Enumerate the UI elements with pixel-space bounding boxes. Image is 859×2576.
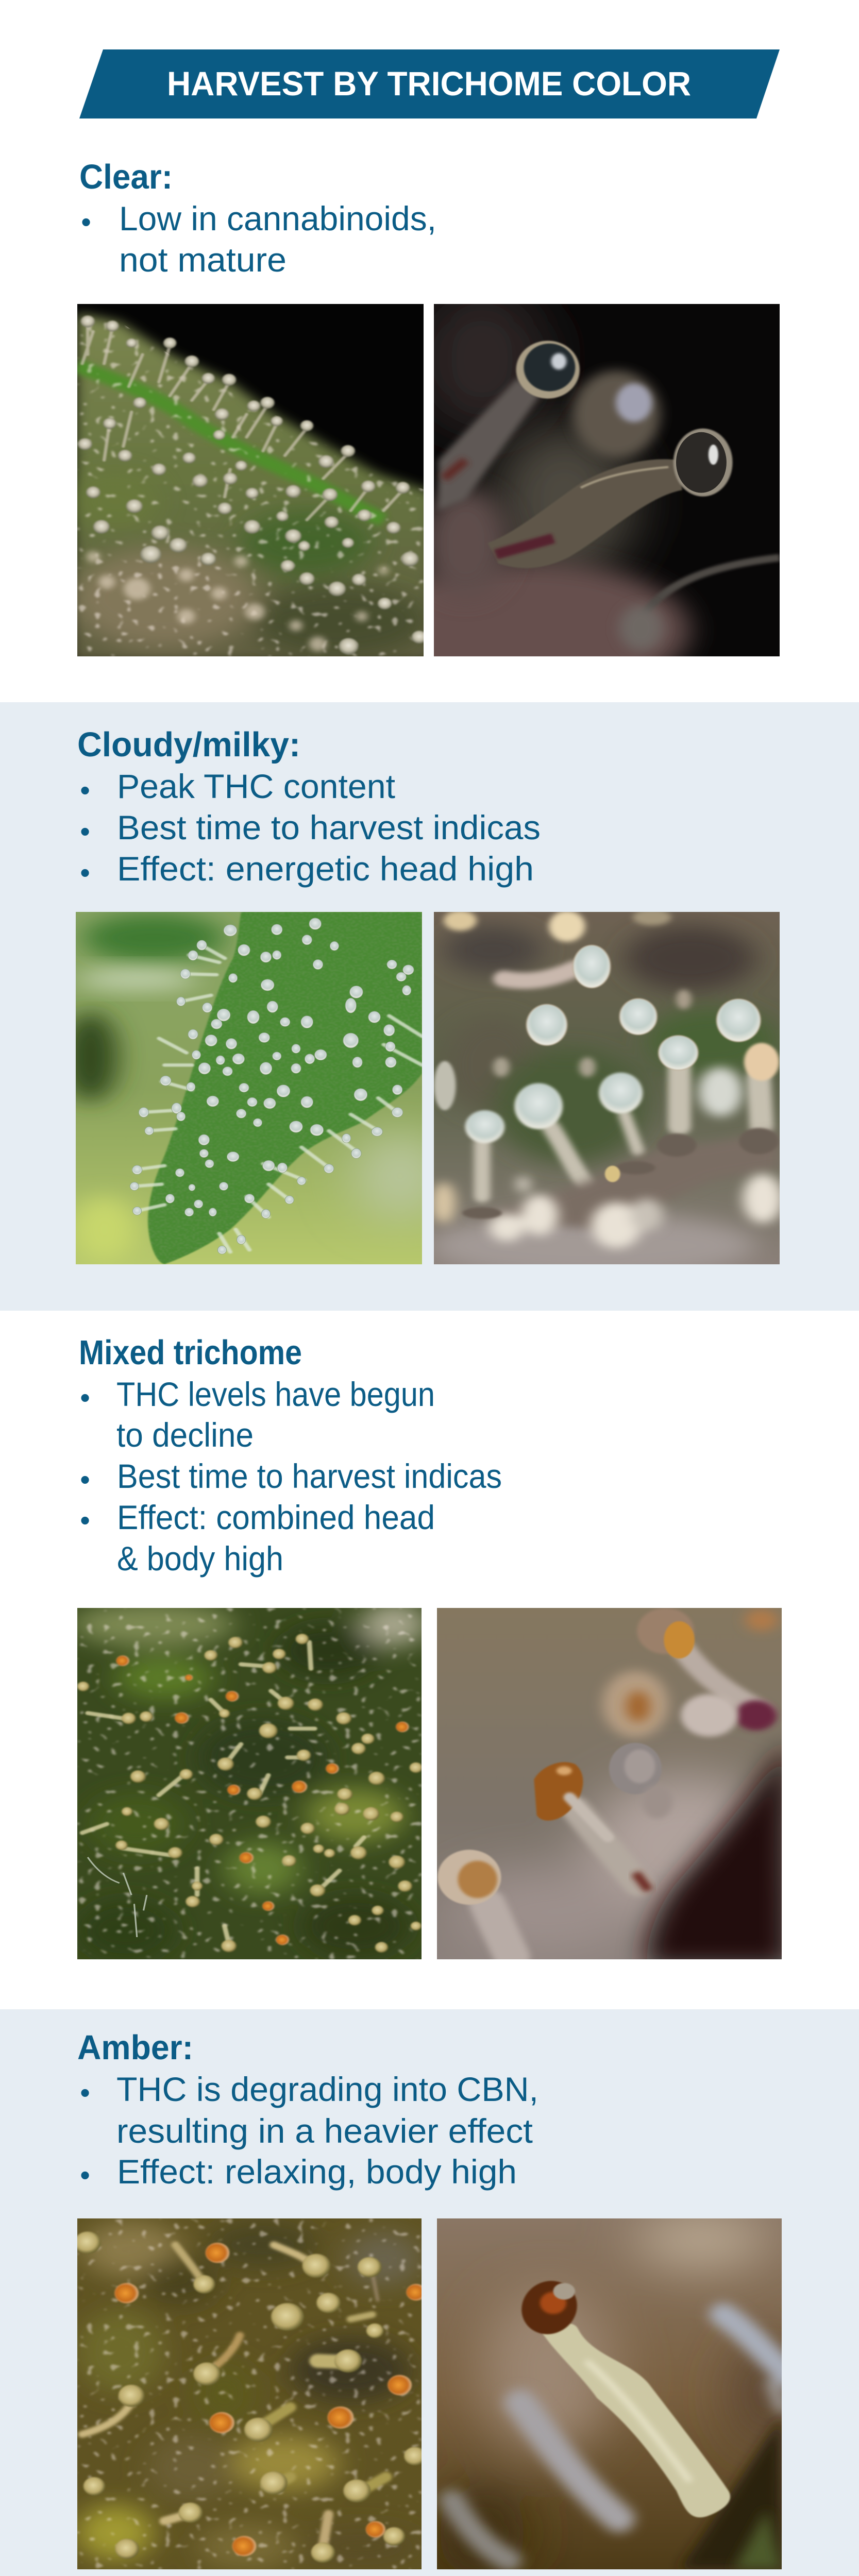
panel: cloudy/milky trichomes (0, 702, 859, 1311)
photo: cloudy trichomes on green leaf (76, 912, 422, 1264)
bullet list: mixed trichome: to decline (116, 1416, 254, 1454)
bullet list: amber: THC is degrading into CBN, (116, 2070, 538, 2108)
bullet list: cloudy/milky: • (80, 774, 90, 806)
bullet list: mixed trichome: Best time to harvest indicas (117, 1457, 502, 1495)
bullet list: amber: resulting in a heavier effect (116, 2112, 533, 2150)
photo: clear trichomes on leaf edge (77, 304, 424, 656)
photo: clear trichome close-up (434, 304, 780, 656)
bullet list: mixed trichome: • (80, 1504, 90, 1536)
bullet list: mixed trichome: • (80, 1463, 90, 1496)
bullet list: cloudy/milky: Peak THC content (117, 767, 395, 805)
panel: clear trichomes (71, 158, 780, 699)
photo: amber and clear trichome close-up (437, 1608, 782, 1959)
bullet list: clear: Low in cannabinoids, (119, 199, 436, 238)
bullet list: clear: • (81, 206, 91, 238)
title banner: HARVEST BY TRICHOME COLOR (167, 64, 691, 103)
bullet list: mixed trichome: Effect: combined head (117, 1498, 435, 1536)
panel: amber trichomes (0, 2009, 859, 2576)
panel: mixed trichomes (71, 1333, 789, 1966)
title banner (79, 49, 780, 118)
bullet list: clear: not mature (119, 241, 287, 279)
bullet list: cloudy/milky: Best time to harvest indicas (117, 808, 541, 846)
bullet list: mixed trichome: • (80, 1381, 90, 1414)
bullet list: amber: • (80, 2159, 90, 2191)
heading: amber: Amber: (77, 2028, 193, 2067)
bullet list: cloudy/milky: • (80, 815, 90, 848)
photo: amber trichomes on bud surface (77, 2218, 422, 2569)
heading: clear: Clear: (79, 158, 173, 196)
bullet list: mixed trichome (80, 1375, 502, 1578)
bullet list: amber: Effect: relaxing, body high (117, 2153, 517, 2191)
bullet list: mixed trichome: THC levels have begun (116, 1375, 435, 1413)
bullet list: cloudy/milky: Effect: energetic head high (117, 850, 534, 888)
bullet list: amber (80, 2070, 538, 2191)
photo: mixed trichomes on bud surface (77, 1608, 422, 1959)
photo: milky trichome heads close-up (434, 912, 780, 1264)
heading: mixed trichome: Mixed trichome (79, 1333, 302, 1372)
bullet list: amber: • (80, 2076, 90, 2109)
bullet list: clear (81, 199, 436, 279)
bullet list: cloudy/milky (80, 767, 541, 889)
heading: cloudy/milky: Cloudy/milky: (77, 725, 300, 764)
photo: amber trichome close-up (437, 2218, 782, 2569)
bullet list: mixed trichome: & body high (117, 1539, 283, 1578)
bullet list: cloudy/milky: • (80, 856, 90, 889)
